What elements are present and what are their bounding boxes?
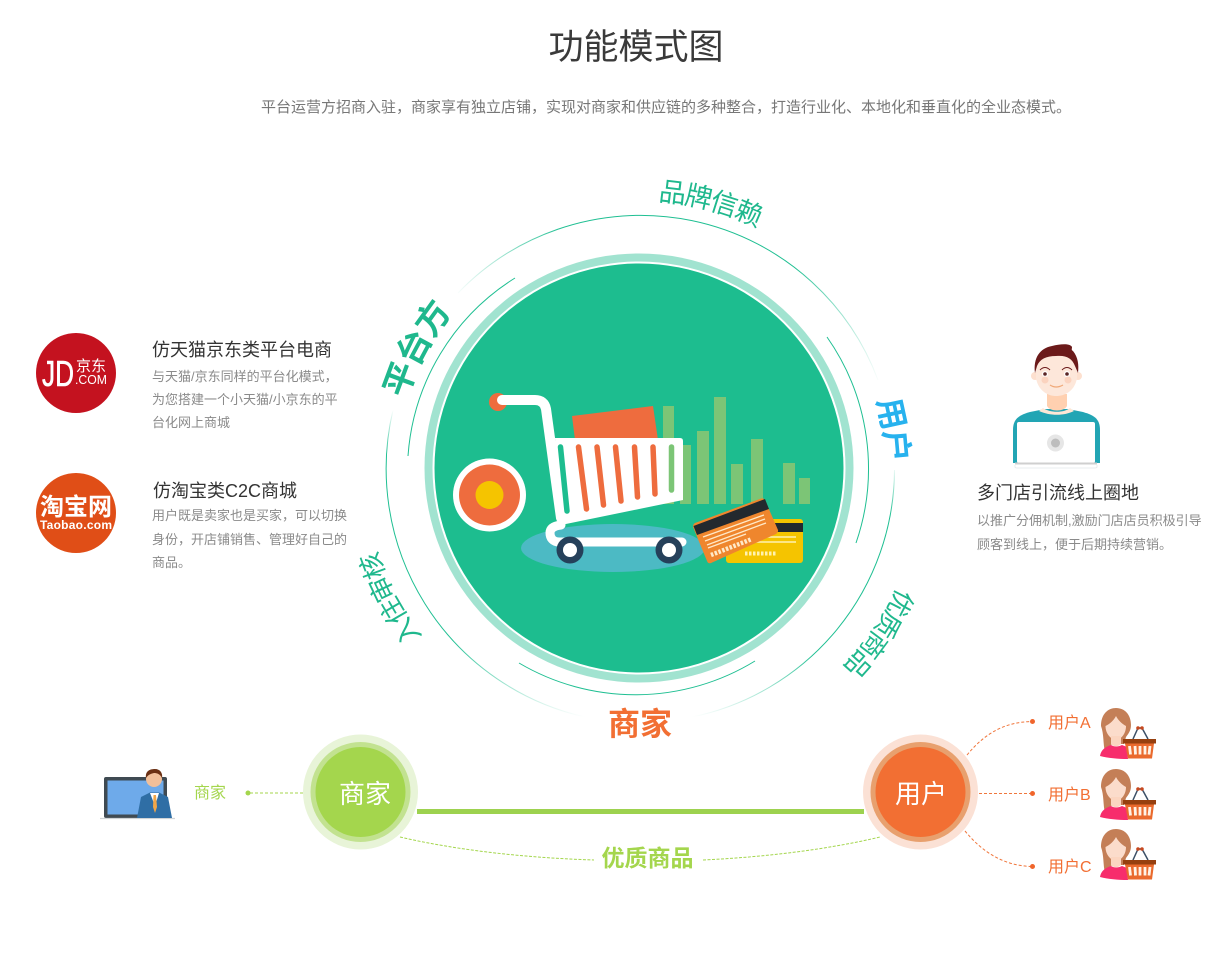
text block: JD description: 与天猫/京东同样的平台化模式， [152, 369, 338, 384]
connector: to user C [965, 831, 1035, 869]
text block: JD description [152, 369, 338, 430]
panel: Taobao C2C feature [36, 473, 347, 570]
outer arc: bottom left [386, 410, 585, 717]
icon: orange bank card [693, 498, 778, 563]
node: user circle [863, 734, 978, 850]
node: user circle: 用户 [895, 779, 947, 809]
flow diagram: merchant to users [100, 708, 1156, 880]
text block: Taobao description: 商品。 [152, 555, 191, 570]
icon: merchant with laptop [100, 769, 175, 818]
icon: man with laptop [1013, 344, 1100, 468]
label: merchant: 商家 [194, 784, 226, 802]
icon: user B with basket [1100, 769, 1156, 820]
icon: user A with basket [1100, 708, 1156, 759]
label: brand trust: 品牌信赖 [660, 180, 762, 228]
icon: Taobao logo: Taobao.com [40, 518, 112, 532]
heading: JD style platform: 仿天猫京东类平台电商 [152, 340, 332, 360]
icon: shopping cart [489, 393, 705, 572]
label: user: 用户 [875, 400, 912, 458]
text block: multi-store description: 以推广分佣机制,激励门店店员积极引导 [977, 513, 1202, 528]
text block: Taobao description [152, 508, 347, 570]
label: quality goods: 优质商品 [602, 845, 694, 871]
outer arc: top [458, 215, 878, 380]
node: merchant circle: 商家 [339, 779, 391, 809]
text block: Taobao description: 用户既是卖家也是买家，可以切换 [152, 508, 347, 523]
icon: JD logo: .COM [75, 372, 107, 387]
label: user C: 用户C [1048, 858, 1092, 876]
bar chart [663, 397, 810, 504]
label: merchant: 商家 [608, 706, 672, 742]
text block: JD description: 为您搭建一个小天猫/小京东的平 [152, 392, 338, 407]
label: platform: 平台方 [381, 299, 449, 395]
ring gap [432, 262, 846, 674]
inner arc: top left [408, 278, 515, 456]
connector: quality goods curve right [703, 837, 880, 860]
connector: main green bar [417, 809, 864, 814]
inner arc: bottom [519, 661, 755, 695]
connector: quality goods curve left [400, 837, 594, 860]
icon: Taobao logo [36, 473, 116, 553]
central ring diagram [358, 180, 914, 742]
icon: Taobao logo: 淘宝网 [40, 493, 112, 521]
text block: multi-store description: 顾客到线上，便于后期持续营销。 [977, 537, 1172, 552]
connector: to user B [979, 791, 1035, 796]
icon: yellow bank card [726, 519, 803, 563]
icon: JD logo: 京东 [76, 358, 106, 375]
title: 功能模式图 [548, 28, 724, 67]
heading: Taobao style mall: 仿淘宝类C2C商城 [153, 481, 297, 501]
heading: multi-store: 多门店引流线上圈地 [977, 483, 1139, 503]
text block: JD description: 台化网上商城 [152, 415, 230, 430]
icon: JD logo [36, 333, 116, 413]
label: merchant onboarding review: 入住审核 [358, 551, 422, 642]
connector: to user A [967, 719, 1035, 755]
label: user B: 用户B [1048, 786, 1091, 804]
ring [424, 254, 854, 682]
text block: multi-store description [977, 513, 1202, 552]
outer arc: bottom right [692, 470, 894, 717]
green disc [434, 264, 844, 672]
icon: user C with basket [1100, 829, 1156, 880]
inner arc: right [827, 337, 868, 543]
subtitle: 平台运营方招商入驻，商家享有独立店铺，实现对商家和供应链的多种整合，打造行业化、本地化和垂直化的全业态模式。 [261, 98, 1071, 116]
label: quality goods: 优质商品 [842, 590, 914, 678]
node: merchant circle [303, 734, 418, 850]
icon: target circle [453, 458, 526, 532]
connector: merchant to circle [246, 790, 303, 796]
panel: JD platform feature [36, 333, 338, 430]
label: user A: 用户A [1048, 714, 1091, 732]
icon: JD logo: JD [42, 353, 74, 394]
text block: Taobao description: 身份，开店铺销售、管理好自己的 [152, 532, 347, 547]
panel: multi-store feature [977, 344, 1202, 552]
